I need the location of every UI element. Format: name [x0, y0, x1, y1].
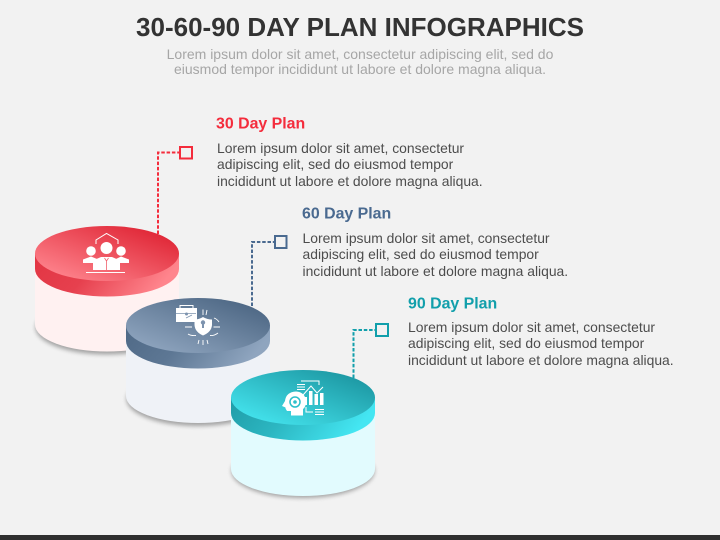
icon: briefcase and shield	[176, 306, 220, 345]
text block: 60 day: Lorem ipsum dolor sit amet, consectetur	[302, 230, 550, 246]
text block: 90 day: Lorem ipsum dolor sit amet, consectetur	[408, 319, 655, 335]
text block: 30 day: Lorem ipsum dolor sit amet, consectetur	[217, 140, 464, 156]
text block: 60 day: adipiscing elit, sed do eiusmod tempor	[302, 246, 539, 262]
text block: 90 day: adipiscing elit, sed do eiusmod tempor	[408, 335, 645, 351]
text block: 30 day	[216, 116, 483, 189]
title: 30-60-90 DAY PLAN INFOGRAPHICS	[136, 12, 584, 42]
connector: 30 day	[158, 147, 192, 234]
text block: 30 day: adipiscing elit, sed do eiusmod tempor	[217, 156, 454, 172]
cylinder: 60 day	[126, 298, 270, 426]
icon: head with gear and bar chart	[282, 381, 324, 416]
subtitle: Lorem ipsum dolor sit amet, consectetur adipiscing elit, sed do	[167, 46, 554, 62]
connector: 60 day	[252, 236, 286, 306]
text block: 60 day	[302, 206, 568, 279]
subtitle	[167, 46, 554, 77]
cylinder: 90 day	[231, 370, 375, 498]
footer bar	[0, 535, 720, 540]
text block: 60 day: incididunt ut labore et dolore magna aliqua.	[302, 263, 568, 279]
subtitle: eiusmod tempor incididunt ut labore et dolore magna aliqua.	[174, 61, 546, 77]
text block: 60 day: 60 Day Plan	[302, 206, 391, 222]
cylinder: 30 day	[35, 226, 179, 354]
text block: 30 day: 30 Day Plan	[216, 116, 305, 132]
icon: team with graduation roof	[83, 234, 129, 273]
text block: 90 day	[408, 296, 674, 368]
text block: 90 day: 90 Day Plan	[408, 296, 497, 312]
text block: 90 day: incididunt ut labore et dolore magna aliqua.	[408, 352, 674, 368]
connector: 90 day	[354, 324, 388, 378]
text block: 30 day: incididunt ut labore et dolore magna aliqua.	[217, 173, 483, 189]
